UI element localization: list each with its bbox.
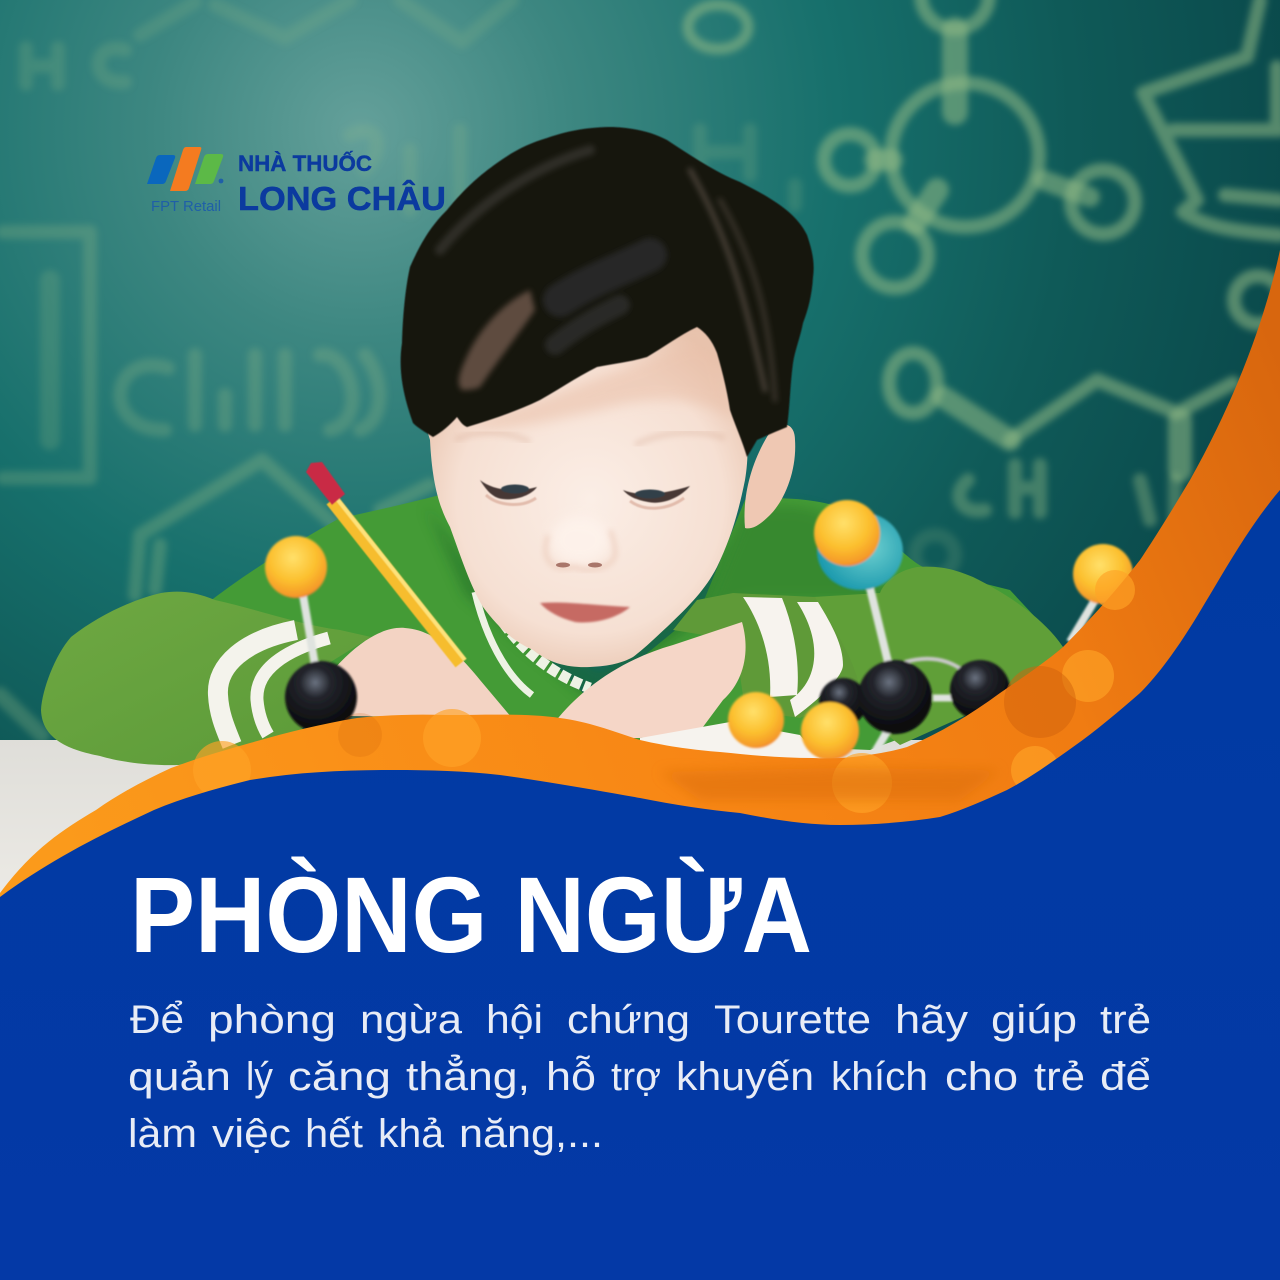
body paragraph: để xyxy=(1100,1055,1151,1099)
black ball left xyxy=(285,661,357,733)
forehead shading below the fringe xyxy=(460,344,735,428)
orange wave xyxy=(0,250,1280,905)
lighter bubbles xyxy=(193,570,1135,813)
body paragraph: trẻ xyxy=(1034,1055,1085,1099)
left eyebrow xyxy=(455,433,530,442)
body paragraph: khuyến xyxy=(676,1055,814,1099)
body paragraph: trẻ xyxy=(1100,998,1151,1042)
right shoulder shade xyxy=(700,505,890,620)
table top xyxy=(0,740,1000,900)
body paragraph: năng,... xyxy=(459,1112,603,1156)
orange ball right xyxy=(1073,544,1133,604)
body paragraph: thẳng, xyxy=(406,1053,530,1099)
body paragraph: căng xyxy=(288,1055,391,1099)
left hand xyxy=(335,628,512,718)
orange ball centre xyxy=(728,692,784,748)
body paragraph xyxy=(128,998,1151,1156)
scalp streak in hair xyxy=(459,290,535,390)
body paragraph: chứng xyxy=(567,998,690,1042)
right sleeve xyxy=(813,567,1063,745)
mouth xyxy=(540,602,630,622)
body paragraph: Tourette xyxy=(714,998,871,1042)
hair sheen xyxy=(440,150,775,400)
black ball far right xyxy=(950,660,1010,720)
photo background: green chalkboard xyxy=(0,0,1280,900)
body paragraph: hỗ xyxy=(546,1054,596,1099)
yellow ball on teal xyxy=(814,500,880,566)
nose xyxy=(546,516,615,569)
ear xyxy=(744,424,795,528)
left eye xyxy=(480,480,537,504)
body paragraph: hội xyxy=(486,998,543,1042)
logo xyxy=(147,147,446,217)
body paragraph: ngừa xyxy=(360,998,463,1042)
black ball back xyxy=(819,678,867,726)
body paragraph: việc xyxy=(212,1112,291,1156)
yellow ball centre xyxy=(801,702,859,760)
collar stripes xyxy=(475,592,590,695)
left sleeve xyxy=(41,592,371,765)
pharmacy label: NHÀ THUỐC xyxy=(238,150,372,176)
shadow around neck xyxy=(425,505,750,700)
body paragraph: hãy xyxy=(895,998,968,1042)
body paragraph: khích xyxy=(831,1055,928,1099)
child xyxy=(41,127,1063,765)
blue wave panel xyxy=(0,490,1280,1280)
paper xyxy=(640,722,830,770)
brand name: LONG CHÂU xyxy=(238,180,446,217)
sticks xyxy=(303,588,1095,752)
sweater torso xyxy=(205,495,1063,750)
body paragraph: hết xyxy=(305,1112,363,1156)
right eyebrow xyxy=(635,432,725,445)
body paragraph: phòng xyxy=(208,998,336,1042)
left cuff stripes xyxy=(218,630,329,745)
body paragraph: Để xyxy=(130,998,184,1042)
right cuff xyxy=(673,593,860,718)
body paragraph: khả xyxy=(378,1112,445,1156)
body paragraph: lý xyxy=(246,1055,273,1099)
black ball right xyxy=(858,660,932,734)
body paragraph: quản xyxy=(128,1055,231,1099)
hair xyxy=(401,127,814,457)
heading: PHÒNG NGỪA xyxy=(130,854,812,975)
face xyxy=(418,290,748,667)
chalk chemistry drawings xyxy=(0,0,1280,735)
right hand and fingers xyxy=(555,622,746,742)
darker bubbles xyxy=(338,666,1076,757)
muted table reflection band xyxy=(660,768,1000,800)
right eye xyxy=(623,486,690,508)
bubbles and shapes seen through orange wave xyxy=(193,570,1135,813)
molecule models xyxy=(265,500,1133,760)
FPT Retail label: FPT Retail xyxy=(151,198,221,215)
body paragraph: trợ xyxy=(611,1055,661,1099)
right cuff stripes xyxy=(743,597,843,717)
pencil xyxy=(306,462,465,663)
yellow ball left xyxy=(265,536,327,598)
logo mark xyxy=(147,147,223,191)
teal ball xyxy=(817,512,903,590)
body paragraph: làm xyxy=(128,1112,197,1156)
body paragraph: cho xyxy=(945,1055,1018,1099)
body paragraph: giúp xyxy=(991,998,1077,1042)
